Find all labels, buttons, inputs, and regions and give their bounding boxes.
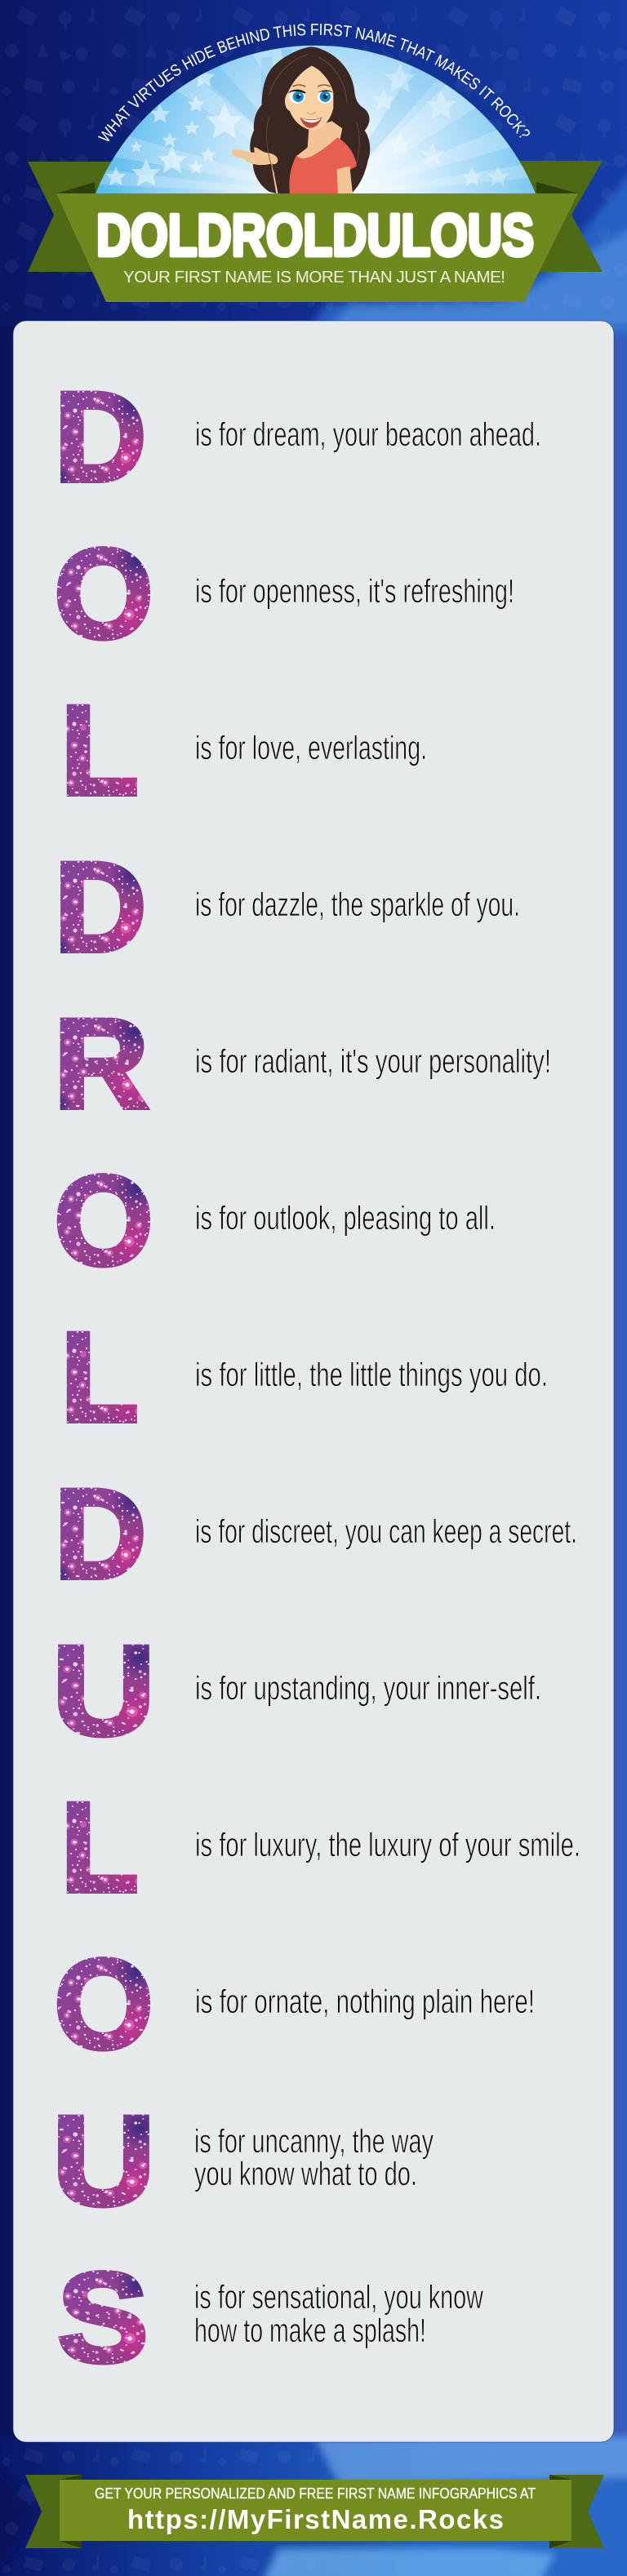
main card [13, 321, 614, 2442]
nose [307, 112, 316, 114]
row: S sensational: S [57, 2247, 149, 2389]
header ribbon back tails [28, 161, 603, 272]
shirt [289, 137, 357, 193]
row: L luxury [60, 1777, 580, 1919]
face [285, 66, 333, 130]
row: S sensational: is for sensational, you know [194, 2278, 483, 2316]
row: L luxury: L [60, 1777, 139, 1919]
footer url: https://MyFirstName.Rocks [127, 2504, 504, 2534]
footer banner [60, 2480, 571, 2541]
row: O outlook: is for outlook, pleasing to all. [195, 1199, 496, 1237]
row: D discreet [55, 1463, 577, 1606]
row: S sensational: how to make a splash! [194, 2312, 426, 2349]
row: D dream [55, 366, 541, 509]
smile [300, 117, 322, 128]
row: D dream: D [55, 366, 146, 509]
hair highlights [267, 55, 359, 174]
name title: DOLDROLDULOUS [96, 203, 534, 269]
dome with sky burst [96, 46, 536, 193]
row: O openness: O [54, 523, 153, 665]
row: O outlook: O [54, 1150, 153, 1292]
row: O ornate [54, 1934, 535, 2076]
row: R radiant [54, 993, 551, 1135]
row: D dazzle: D [55, 837, 146, 979]
row: O openness [54, 523, 514, 665]
row: U uncanny: U [52, 2090, 155, 2232]
row: O ornate: O [54, 1934, 153, 2076]
row: O outlook [54, 1150, 496, 1292]
row: U uncanny: is for uncanny, the way [194, 2122, 434, 2160]
row: L love: L [60, 680, 139, 822]
row: L love: is for love, everlasting. [195, 729, 427, 766]
arched tagline: WHAT VIRTUES HIDE BEHIND THIS FIRST NAME THAT MAKES IT ROCK? [98, 24, 530, 142]
row: U uncanny [52, 2090, 434, 2232]
footer ribbon tails [25, 2475, 604, 2548]
row: D discreet: D [55, 1463, 146, 1606]
row: L love [60, 680, 427, 822]
hair [250, 47, 370, 193]
row: U upstanding: U [52, 1620, 155, 1762]
character: smiling woman [232, 47, 370, 193]
footer call to action: GET YOUR PERSONALIZED AND FREE FIRST NAME INFOGRAPHICS AT [95, 2485, 536, 2502]
row: L little [60, 1307, 548, 1449]
neck and chest [296, 121, 342, 163]
row: D dazzle [55, 837, 520, 979]
row: L little: L [60, 1307, 139, 1449]
header ribbon folds [56, 182, 578, 193]
header banner [56, 193, 578, 302]
eyes [288, 85, 333, 104]
subtitle: YOUR FIRST NAME IS MORE THAN JUST A NAME! [123, 268, 505, 286]
right arm [337, 166, 353, 193]
left arm and hand [232, 147, 291, 193]
row: R radiant: R [54, 993, 149, 1135]
row: U uncanny: you know what to do. [194, 2155, 417, 2192]
row: U upstanding [52, 1620, 541, 1762]
row: S sensational [57, 2247, 483, 2389]
